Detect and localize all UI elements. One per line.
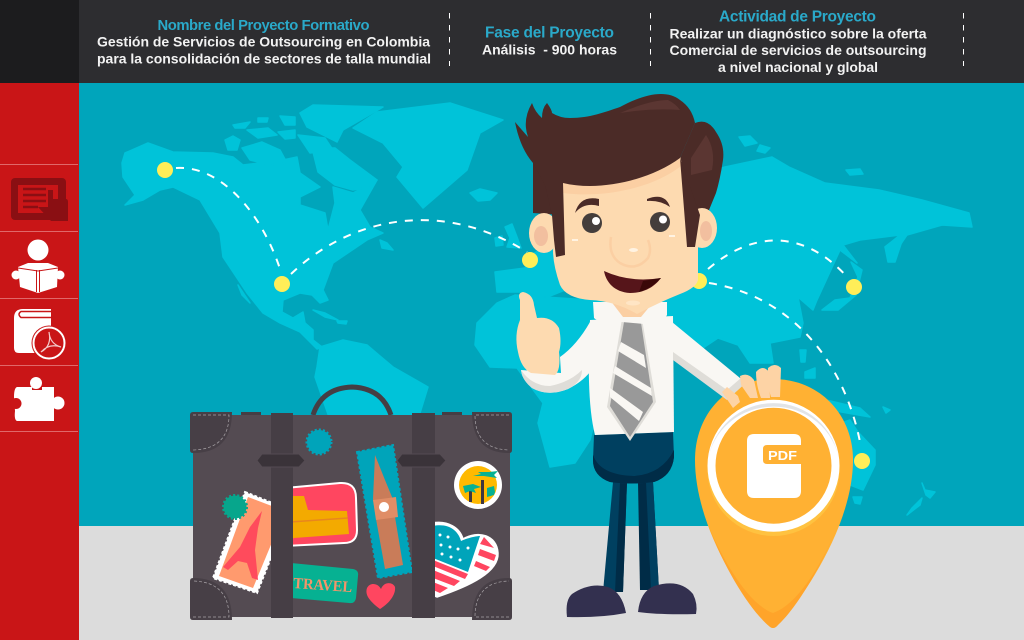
trousers [593, 432, 674, 484]
pin ring [712, 404, 836, 528]
corner bottom right [472, 578, 512, 620]
suitcase tabs [241, 412, 462, 416]
Europe [495, 240, 620, 305]
Iceland [470, 189, 497, 201]
header background [79, 0, 1024, 83]
location dots [157, 162, 870, 469]
finger 2 [756, 368, 770, 398]
necktie [607, 313, 656, 441]
activity line 1: Realizar un diagnóstico sobre la oferta [670, 26, 927, 42]
suitcase strap left [271, 413, 293, 618]
left ear [529, 213, 559, 253]
left eyebrow [575, 198, 599, 213]
Arctic islands [739, 136, 757, 146]
finger 3 [768, 365, 781, 397]
businessman character [515, 94, 781, 617]
Canadian island 5 [278, 130, 295, 139]
North America [122, 143, 383, 349]
suitcase [190, 387, 512, 620]
fingers on pin [722, 365, 781, 408]
hair highlight [620, 100, 680, 113]
right leg shade [646, 482, 659, 590]
Asia [600, 157, 972, 363]
icon: book with PDF symbol [14, 309, 66, 360]
right eye [650, 212, 670, 232]
ring inner shade [708, 403, 839, 461]
sticker: Big Ben [357, 445, 412, 578]
Canadian island 4 [247, 128, 277, 138]
hair highlight side [691, 135, 713, 175]
shirt body [589, 316, 674, 435]
Baja California [238, 285, 250, 303]
buckle right [397, 454, 446, 467]
right ear inner [700, 221, 712, 241]
floor [79, 526, 1024, 640]
Cuba [313, 310, 338, 320]
icon: puzzle piece [10, 377, 64, 421]
nose [610, 237, 650, 267]
Indonesia [790, 385, 870, 417]
left eye [582, 213, 602, 233]
sticker: palm trees [454, 461, 502, 509]
Newfoundland [380, 240, 393, 250]
dot Europe [522, 252, 538, 268]
dot Australia [854, 453, 870, 469]
sleeve shade [521, 370, 582, 393]
sticker: small heart [366, 583, 395, 609]
pin body [695, 379, 853, 628]
Philippines [800, 350, 806, 362]
mouth [604, 271, 661, 293]
Ireland [495, 236, 503, 246]
activity line 3: a nivel nacional y global [718, 59, 878, 75]
map background panel [79, 83, 1024, 526]
corner bottom left [190, 578, 232, 620]
right eye highlight [659, 216, 667, 224]
thumbs up hand [516, 292, 560, 375]
project name block [97, 18, 431, 66]
sticker: green seal [224, 496, 246, 518]
finger 1 [740, 375, 758, 398]
Pacific islands [883, 407, 890, 413]
PDF document icon: PDF [768, 448, 797, 463]
Japan [822, 262, 862, 310]
sticker: travel label [291, 563, 358, 603]
nose highlight [629, 248, 638, 252]
Tasmania [853, 497, 862, 504]
dot Asia [691, 273, 707, 289]
Canadian island 6 [298, 135, 333, 153]
forehead shadow [563, 158, 681, 194]
suitcase handle [313, 387, 391, 415]
cheek marks [572, 236, 675, 240]
Hispaniola [337, 321, 347, 324]
Ellesmere island [300, 105, 383, 142]
Sakhalin [885, 232, 905, 262]
activity title: Actividad de Proyecto [719, 8, 876, 26]
chin highlight [626, 300, 640, 306]
corner top right [472, 412, 512, 453]
pin ring shadow [708, 404, 840, 536]
left leg [603, 482, 627, 592]
Baffin island [312, 148, 377, 190]
Greenland [353, 103, 503, 208]
icon: person reading [12, 240, 64, 293]
UK [505, 224, 521, 248]
route Asia to Australia [709, 283, 861, 447]
project name line 2: para la consolidación de sectores de talla mundial [97, 50, 431, 66]
Novaya islands [846, 169, 863, 175]
Canadian island 2 [225, 136, 240, 150]
sticker: Colosseum [285, 483, 357, 546]
Australia [815, 420, 875, 490]
phase detail: Análisis - 900 horas [482, 42, 617, 58]
sticker: teal seal [307, 430, 331, 454]
world map [122, 103, 972, 515]
South America [315, 340, 428, 420]
dashed flight routes [176, 168, 861, 447]
project name line 1: Gestión de Servicios de Outsourcing en Colombia [97, 34, 430, 50]
sticker: American flag heart [432, 522, 498, 597]
trousers shade [593, 450, 674, 484]
route Asia to Japan [708, 240, 848, 278]
phase title: Fase del Proyecto [485, 24, 614, 42]
PDF document icon [747, 434, 801, 498]
left eye highlight [592, 217, 600, 225]
left shoe [567, 586, 626, 617]
collar [593, 302, 667, 324]
sticker: travel label: TRAVEL [293, 575, 353, 596]
corner top left [190, 412, 232, 453]
phase block [482, 24, 617, 58]
suitcase body [193, 415, 510, 617]
dot Alaska [157, 162, 173, 178]
mouth shade [639, 278, 661, 292]
project name title: Nombre del Proyecto Formativo [158, 18, 370, 34]
back hair [533, 122, 723, 215]
sidebar [0, 83, 79, 640]
New Zealand north [922, 483, 935, 498]
suitcase strap right [412, 413, 435, 618]
header bar [0, 0, 1024, 83]
route Mexico to Europe [291, 220, 527, 274]
neck [610, 300, 655, 317]
Africa [475, 295, 640, 467]
Borneo [805, 368, 815, 378]
arm shade [673, 352, 748, 400]
map pin [695, 379, 853, 628]
activity block [670, 8, 927, 75]
icon: tablet with hand [11, 178, 68, 221]
activity line 2: Comercial de servicios de outsourcing [670, 42, 926, 58]
right ear [687, 208, 717, 248]
shirt arm right [672, 322, 748, 397]
buckle left [257, 454, 305, 467]
hair [515, 94, 700, 257]
Canadian island 8 [280, 116, 295, 125]
dot Japan [846, 279, 862, 295]
Canadian island 3 [242, 142, 287, 165]
dot Mexico [274, 276, 290, 292]
Arctic islands 2 [757, 145, 770, 153]
right leg [638, 482, 659, 590]
Canadian island 9 [258, 118, 268, 122]
Canadian island 7 [233, 122, 250, 128]
pin tip shadow [708, 525, 838, 628]
header corner [0, 0, 79, 83]
thumb [722, 387, 740, 408]
left leg shade [615, 482, 627, 592]
right eyebrow [647, 197, 670, 207]
shirt sleeve left [521, 322, 590, 393]
left ear inner [534, 226, 548, 246]
route Alaska to Mexico [176, 168, 281, 272]
sidebar background [0, 83, 79, 640]
right shoe [638, 583, 697, 614]
New Zealand south [907, 498, 922, 515]
face [553, 155, 698, 314]
sticker: Eiffel stamp [213, 492, 290, 593]
